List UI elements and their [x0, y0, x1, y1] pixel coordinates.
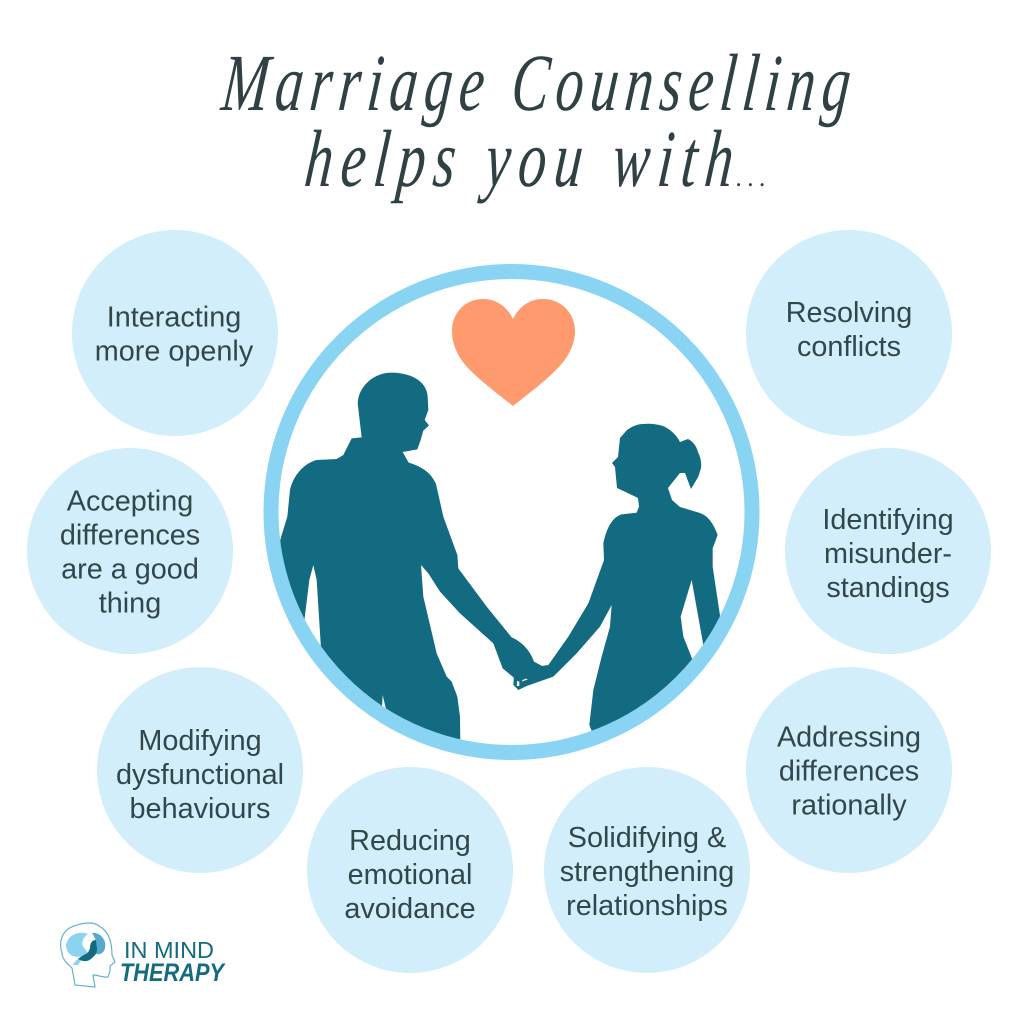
icon: heart	[452, 299, 575, 406]
panel: Modifying dysfunctional behaviours	[97, 667, 303, 873]
panel: Reducing emotional avoidance: Reducing	[349, 825, 471, 857]
panel: Modifying dysfunctional behaviours: Modifying	[138, 725, 262, 757]
title	[217, 39, 855, 205]
panel: Addressing differences rationally: Addressing	[777, 722, 921, 754]
title: Marriage Counselling	[217, 39, 855, 129]
panel: Identifying misunderstandings: misunder-	[824, 538, 952, 570]
panel: Solidifying and strengthening relationships: strengthening	[560, 856, 734, 888]
panel: Identifying misunderstandings	[785, 448, 991, 654]
logo	[60, 923, 226, 987]
panel: Modifying dysfunctional behaviours: behaviours	[130, 793, 270, 825]
panel: Interacting more openly	[72, 230, 278, 436]
panel: Reducing emotional avoidance: avoidance	[344, 893, 476, 925]
panel: Resolving conflicts	[746, 230, 952, 436]
icon: brain lower lobe	[73, 956, 84, 965]
panel: Solidifying and strengthening relationships	[544, 767, 750, 973]
icon: brain light lobe	[66, 933, 88, 957]
panel: Accepting differences: thing	[99, 588, 161, 620]
panel: Interacting more openly: more openly	[95, 336, 254, 368]
couple silhouette	[273, 373, 722, 767]
panel: Resolving conflicts: conflicts	[797, 331, 901, 363]
logo text: THERAPY: THERAPY	[120, 959, 226, 987]
icon: brain right lobe	[92, 933, 105, 954]
title: ...	[736, 163, 766, 192]
panel: Reducing emotional avoidance	[307, 767, 513, 973]
title: helps you with	[301, 115, 738, 205]
panel: Resolving conflicts: Resolving	[786, 297, 912, 329]
central ring	[271, 272, 752, 752]
panel: Accepting differences	[27, 448, 233, 654]
panel: Identifying misunderstandings: Identifying	[822, 504, 954, 536]
logo text: IN MIND: IN MIND	[124, 937, 214, 963]
panel: Accepting differences: are a good	[61, 554, 199, 586]
panel: Interacting more openly: Interacting	[107, 302, 241, 334]
panel: Solidifying and strengthening relationships: Solidifying &	[568, 822, 726, 854]
icon: bird	[78, 940, 97, 961]
panel: Reducing emotional avoidance: emotional	[348, 859, 472, 891]
panel: Modifying dysfunctional behaviours: dysfunctional	[116, 759, 284, 791]
man silhouette	[273, 373, 543, 767]
central circle background	[272, 272, 752, 752]
panel: Accepting differences: Accepting	[67, 486, 193, 518]
panel: Addressing differences rationally: rationally	[791, 790, 907, 822]
panel: Addressing differences rationally: differences	[779, 756, 919, 788]
woman silhouette	[513, 424, 722, 743]
panel: Solidifying and strengthening relationships: relationships	[566, 890, 728, 922]
icon: head outline	[60, 923, 115, 987]
panel: Identifying misunderstandings: standings	[826, 572, 950, 604]
panel: Addressing differences rationally	[746, 667, 952, 873]
panel: Accepting differences: differences	[60, 520, 200, 552]
